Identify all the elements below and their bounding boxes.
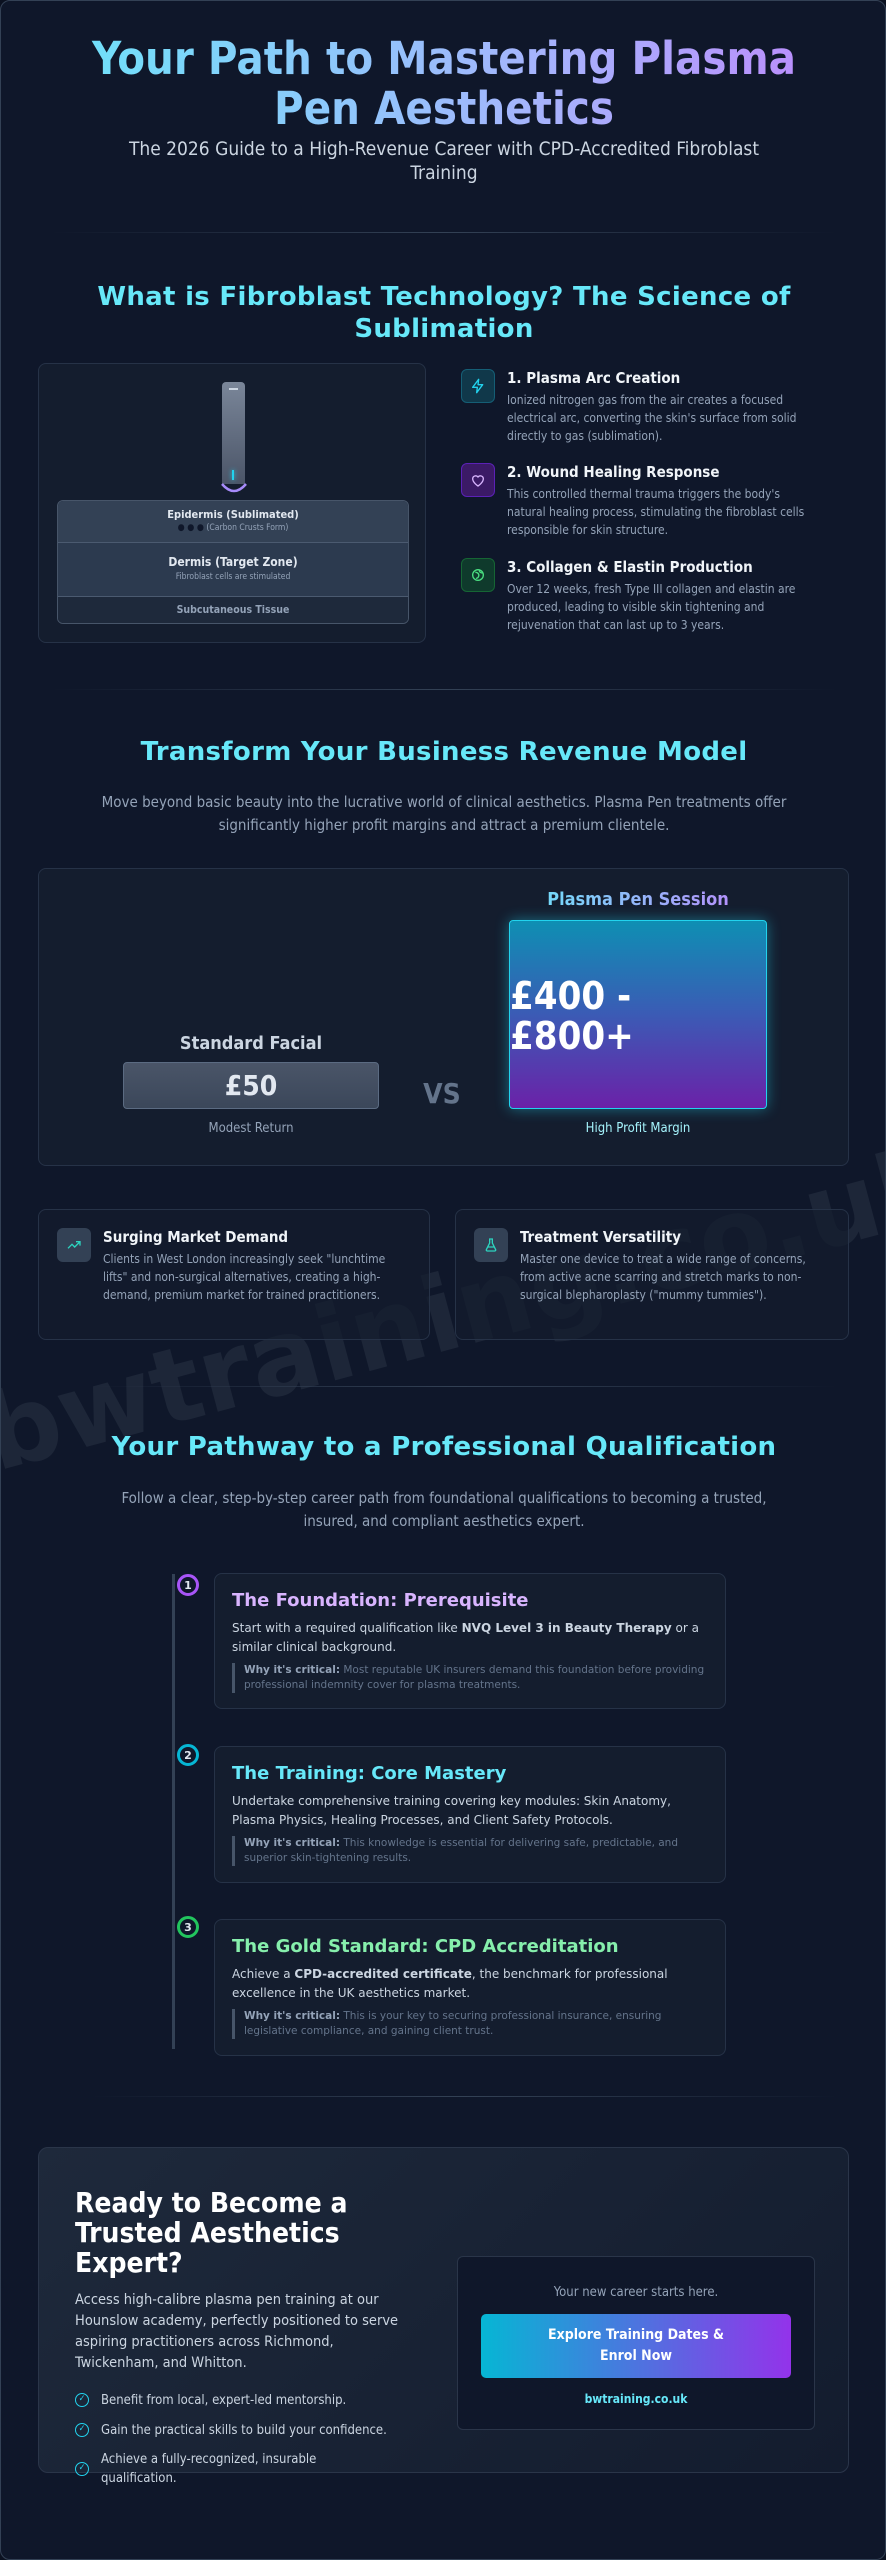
card: versatility: Treatment Versatility xyxy=(520,1228,681,1246)
step marker 3: 3 xyxy=(184,1920,192,1934)
bar: standard facial: Standard Facial xyxy=(180,1033,322,1054)
step marker 1: 1 xyxy=(184,1578,192,1592)
card: foundation: Why it's critical: Most reputable UK insurers demand this foundation before providing professional indemnity cover for plasma treatments. xyxy=(244,1664,704,1691)
step marker 2 xyxy=(177,1744,199,1766)
card: training: Undertake comprehensive training covering key modules: Skin Anatomy, Plasma Physics, Healing Processes, and Client Safety Protocols. xyxy=(232,1794,671,1827)
panel: skin diagram xyxy=(38,363,426,643)
button: Explore Training Dates & xyxy=(548,2327,724,2343)
layer: epidermis xyxy=(58,501,408,543)
step marker 1 xyxy=(177,1574,199,1596)
benefits list: ✓ xyxy=(79,2463,85,2473)
steps list xyxy=(461,369,804,632)
step 3 xyxy=(461,558,795,632)
button: Enrol Now xyxy=(600,2348,672,2364)
icon: plasma pen xyxy=(221,382,247,492)
layer: dermis: Fibroblast cells are stimulated xyxy=(176,572,290,582)
benefits list: ✓ xyxy=(79,2394,85,2404)
benefits list: Gain the practical skills to build your confidence. xyxy=(101,2422,387,2438)
layer: epidermis: ● ● ● (Carbon Crusts Form) xyxy=(178,523,288,533)
cta box: bwtraining.co.uk xyxy=(585,2392,687,2406)
title: Your Path to Mastering Plasma Pen Aesthetics xyxy=(92,32,796,135)
step 3: Over 12 weeks, fresh Type III collagen and elastin are produced, leading to visible skin tightening and rejuvenation that can last up to 3 years. xyxy=(507,582,795,632)
card: versatility: Master one device to treat a wide range of concerns, from active acne scarring and stretch marks to non-surgical blepharoplasty ("mummy tummies"). xyxy=(520,1252,806,1302)
step 3: 3. Collagen & Elastin Production xyxy=(507,558,753,576)
step 1: Ionized nitrogen gas from the air creates a focused electrical arc, converting the skin's surface from solid directly to gas (sublimation). xyxy=(507,393,796,443)
card: training: The Training: Core Mastery xyxy=(232,1763,506,1784)
subtitle: The 2026 Guide to a High-Revenue Career with CPD-Accredited Fibroblast Training xyxy=(129,138,759,184)
card: market demand: Clients in West London increasingly seek "lunchtime lifts" and non-surgical alternatives, creating a high-demand, premium market for trained practitioners. xyxy=(103,1252,385,1302)
bar: plasma pen session: High Profit Margin xyxy=(586,1121,690,1136)
step 2 xyxy=(461,463,804,537)
benefits list: Benefit from local, expert-led mentorship. xyxy=(101,2392,346,2408)
button xyxy=(481,2314,791,2378)
benefits list: Achieve a fully-recognized, insurable qualification. xyxy=(101,2452,316,2486)
icon: trend xyxy=(57,1228,91,1262)
card: cpd: The Gold Standard: CPD Accreditation xyxy=(232,1936,619,1957)
layer: epidermis: Epidermis (Sublimated) xyxy=(167,508,299,521)
cta box: Your new career starts here. xyxy=(554,2285,718,2300)
card: cpd xyxy=(214,1919,726,2056)
icon: flask xyxy=(474,1228,508,1262)
bar: plasma pen session: £800+ xyxy=(510,1014,634,1058)
card: versatility xyxy=(455,1209,849,1340)
bar: plasma pen session xyxy=(500,889,776,1136)
layer: subcutaneous: Subcutaneous Tissue xyxy=(177,604,289,616)
bar: standard facial xyxy=(123,1033,379,1136)
card: foundation: Start with a required qualification like NVQ Level 3 in Beauty Therapy or a similar clinical background. xyxy=(232,1621,699,1654)
card: training xyxy=(214,1746,726,1883)
step marker 3 xyxy=(177,1916,199,1938)
heading: revenue model: Transform Your Business Revenue Model xyxy=(141,737,747,767)
panel: call to action xyxy=(38,2147,849,2473)
card: training: Why it's critical: This knowledge is essential for delivering safe, predictable, and superior skin-tightening results. xyxy=(244,1837,678,1864)
step marker 2: 2 xyxy=(184,1748,192,1762)
card: foundation xyxy=(214,1573,726,1709)
revenue intro text: Move beyond basic beauty into the lucrative world of clinical aesthetics. Plasma Pen treatments offer significantly higher profit margins and attract a premium clientele. xyxy=(102,793,786,834)
cta heading: Ready to Become a Trusted Aesthetics Expert? xyxy=(75,2186,347,2279)
bar: standard facial: £50 xyxy=(225,1069,277,1102)
bar: plasma pen session: £400 - xyxy=(510,974,631,1018)
card: market demand xyxy=(38,1209,430,1340)
card: cpd: Why it's critical: This is your key to securing professional insurance, ensuring legislative compliance, and gaining client trust. xyxy=(244,2010,661,2037)
step 1: 1. Plasma Arc Creation xyxy=(507,369,680,387)
panel: price comparison chart xyxy=(38,868,849,1166)
layer: subcutaneous xyxy=(58,597,408,625)
bar: standard facial: Modest Return xyxy=(208,1121,294,1136)
cta text: Access high-calibre plasma pen training at our Hounslow academy, perfectly positioned to serve aspiring practitioners across Richmond, Twickenham, and Whitton. xyxy=(75,2292,398,2371)
skin layers xyxy=(57,500,409,624)
layer: dermis xyxy=(58,543,408,597)
heading: fibroblast technology: What is Fibroblast Technology? The Science of Sublimation xyxy=(97,282,791,344)
vs label: VS xyxy=(423,1077,461,1110)
layer: dermis: Dermis (Target Zone) xyxy=(168,555,298,569)
step 1 xyxy=(461,369,796,443)
cta box xyxy=(457,2256,815,2430)
bar: plasma pen session: Plasma Pen Session xyxy=(547,889,729,910)
pathway intro text: Follow a clear, step-by-step career path from foundational qualifications to becoming a trusted, insured, and compliant aesthetics expert. xyxy=(121,1489,767,1530)
benefits list: ✓ xyxy=(79,2424,85,2434)
card: foundation: The Foundation: Prerequisite xyxy=(232,1590,529,1611)
step 2: This controlled thermal trauma triggers the body's natural healing process, stimulating the fibroblast cells responsible for skin structure. xyxy=(507,487,804,537)
step 2: 2. Wound Healing Response xyxy=(507,463,720,481)
heading: pathway: Your Pathway to a Professional Qualification xyxy=(112,1432,776,1462)
timeline xyxy=(172,1573,726,2056)
benefits list xyxy=(75,2392,387,2486)
card: cpd: Achieve a CPD-accredited certificate, the benchmark for professional excellence in the UK aesthetics market. xyxy=(232,1967,668,2000)
card: market demand: Surging Market Demand xyxy=(103,1228,288,1246)
